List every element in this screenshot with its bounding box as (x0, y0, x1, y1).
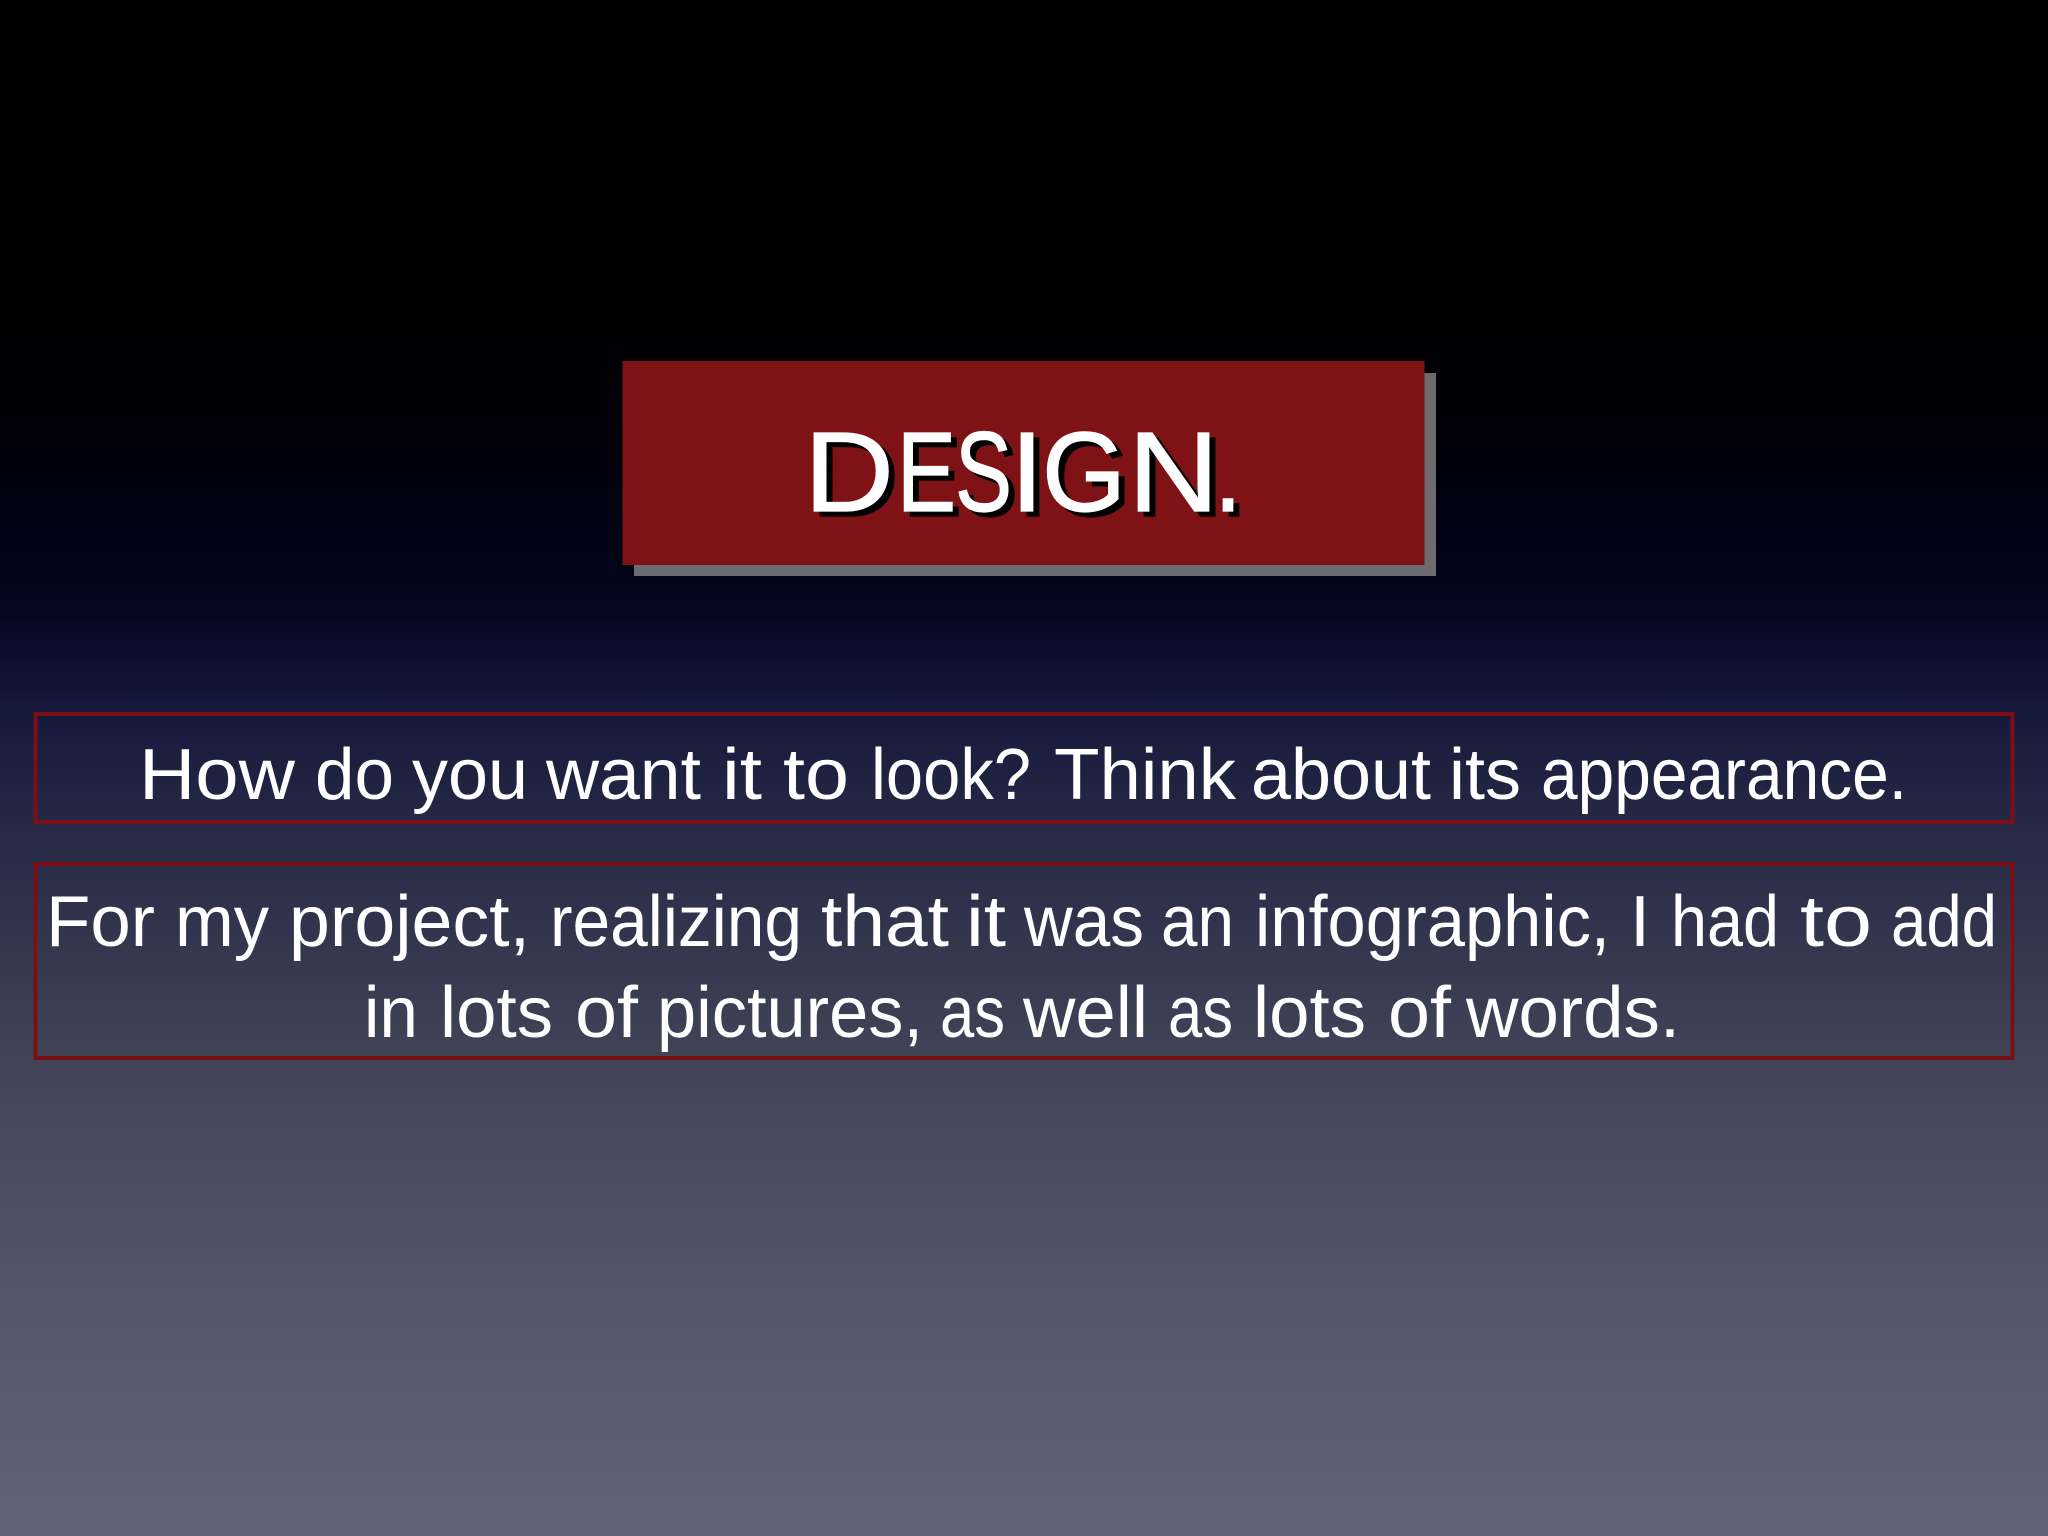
banner shadow (634, 373, 1436, 576)
panel: appearance question (36, 714, 2012, 822)
title: DESIGN.: S (955, 409, 1012, 535)
project text: was (1023, 882, 1144, 962)
title: DESIGN.: N (1128, 409, 1219, 535)
project text: add (1891, 882, 1997, 962)
project text: in (364, 973, 418, 1053)
project text: of (575, 973, 639, 1053)
project text: I (1630, 882, 1650, 962)
appearance text: to (783, 735, 849, 815)
title: DESIGN.: E (897, 409, 956, 535)
appearance text: appearance. (1541, 735, 1907, 815)
appearance text: How (139, 735, 296, 815)
project text: words. (1465, 973, 1680, 1053)
project text: an (1161, 882, 1234, 962)
project text: of (1388, 973, 1452, 1053)
project box (36, 864, 2012, 1058)
title: DESIGN.: I (1010, 409, 1044, 535)
project text: well (1022, 973, 1148, 1053)
appearance text: do (315, 735, 394, 815)
title: DESIGN.: D (804, 409, 894, 535)
appearance text: it (722, 735, 762, 815)
project text: pictures, (657, 973, 923, 1053)
appearance text: its (1449, 735, 1521, 815)
appearance text: want (545, 735, 701, 815)
project text: realizing (550, 882, 802, 962)
project text: lots (1253, 973, 1366, 1053)
title: DESIGN.: . (1214, 409, 1242, 535)
project text: lots (440, 973, 553, 1053)
title banner (622, 361, 1436, 576)
appearance text: look? (871, 735, 1031, 815)
appearance text: about (1251, 735, 1431, 815)
project text: as (940, 973, 1005, 1053)
project text (46, 882, 1997, 1053)
appearance box (36, 714, 2012, 822)
appearance text: you (412, 735, 528, 815)
project text: had (1671, 882, 1779, 962)
banner panel (622, 361, 1424, 565)
project text: my (175, 882, 269, 962)
project text: as (1168, 973, 1233, 1053)
appearance text: Think (1054, 735, 1237, 815)
project text: infographic, (1255, 882, 1610, 962)
project text: it (966, 882, 1006, 962)
project text: to (1800, 882, 1872, 962)
panel: project description (36, 864, 2012, 1058)
project text: project, (289, 882, 530, 962)
project text: For (46, 882, 155, 962)
title: DESIGN.: G (1042, 409, 1126, 535)
project text: that (821, 882, 949, 962)
